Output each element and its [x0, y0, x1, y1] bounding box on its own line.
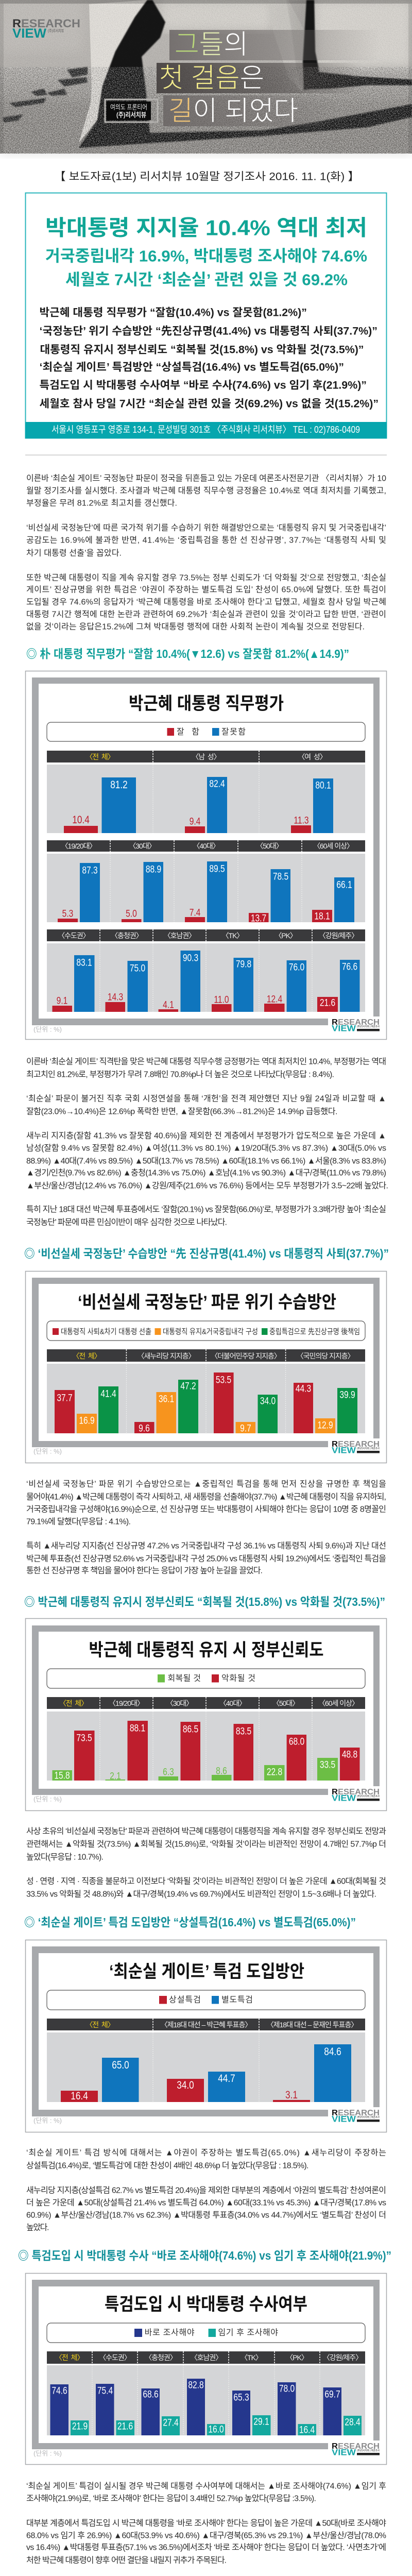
- section heading 1: ◎ 朴 대통령 직무평가 “잘함 10.4%(▼12.6) vs 잘못함 81.2%(▲14.9)”: [26, 647, 349, 660]
- intro text block: 공감도는 16.9%에 불과한 반면, 41.4%는 ‘중립특검을 통한 선 진상규명’, 37.7%는 ‘대통령직 사퇴 및: [26, 536, 386, 545]
- bar chart investigation: 21.9: [72, 2420, 88, 2432]
- age header: 〈40대〉: [219, 1699, 246, 1707]
- bar chart investigation: 28.4: [345, 2416, 360, 2428]
- bar chart total gender: 81.2: [110, 779, 128, 791]
- chart logo: [332, 1439, 380, 1455]
- bar chart age: 66.1: [336, 879, 352, 890]
- bar chart party: 39.9: [339, 1389, 355, 1400]
- unit note: (단위 : %): [33, 2116, 62, 2125]
- legend: 대통령직 사퇴&차기 대통령 선출: [61, 1327, 151, 1336]
- summary list: ‘최순실 게이트’ 특검방안 “상설특검(16.4%) vs 별도특검(65.0%)”: [39, 362, 344, 373]
- chart logo: (주)리서치뷰 | 여론조사: [357, 1794, 380, 1798]
- panel: chart 4 special prosecutor: [26, 1940, 386, 2132]
- legend: [47, 1321, 365, 1341]
- bar chart investigation: 27.4: [163, 2417, 179, 2428]
- chart logo: (주)리서치뷰 | 여론조사: [357, 1447, 380, 1450]
- unit note: (단위 : %): [33, 1795, 62, 1803]
- total gender header: 〈전 체〉: [85, 753, 114, 761]
- text block after chart 2: ‘비선실세 국정농단’ 파문 위기 수습방안으로는 ▲중립적인 특검을 통해 먼저 진상을 규명한 후 책임을: [26, 1480, 386, 1489]
- bar chart region: 9.1: [57, 995, 67, 1006]
- age header: 〈전 체〉: [59, 1699, 88, 1707]
- chart logo: (주)리서치뷰 | 여론조사: [357, 1025, 380, 1028]
- bar chart investigation: 75.4: [97, 2385, 113, 2396]
- text block after chart 3: 33.5% vs 악화될 것 48.8%)와 ▲대구/경북(19.4% vs 69.7%)에서도 비관적인 전망이 1.5~3.6배나 더 높았다.: [26, 1890, 376, 1899]
- hero logo: (주)리서치뷰: [48, 29, 64, 33]
- bar chart region: 75.0: [130, 962, 145, 974]
- bar chart trust: 83.5: [236, 1725, 251, 1737]
- text block after chart 1: ▲부산/울산/경남(12.4% vs 76.0%) ▲강원/제주(21.6% vs 76.6%) 등에서는 모두 부정평가가 3.5~22배 높았다.: [26, 1181, 388, 1190]
- legend: 상설특검: [169, 1995, 201, 2004]
- bar chart party: [47, 1364, 365, 1434]
- legend: [47, 2323, 365, 2343]
- chart logo: RESEARCH: [332, 2442, 380, 2450]
- bar chart party: 37.7: [57, 1392, 73, 1403]
- intro text block: ‘비선실세 국정농단’에 따른 국가적 위기를 수습하기 위한 해결방안으로는 ‘대통령직 유지 및 거국중립내각’: [26, 523, 386, 533]
- bar chart age: 18.1: [314, 910, 330, 922]
- text block after chart 5: [26, 2481, 386, 2565]
- bar chart trust: 8.6: [216, 1765, 227, 1776]
- bar chart investigation: 69.7: [324, 2388, 340, 2400]
- hero image: footprint in sand: [0, 0, 412, 154]
- region header: 〈강원/제주〉: [323, 2353, 362, 2362]
- bar chart age: 89.5: [209, 863, 225, 874]
- age header: 〈30대〉: [166, 1699, 193, 1707]
- text block after chart 5: 68.0% vs 임기 후 26.9%) ▲60대(53.9% vs 40.6%) ▲대구/경북(65.3% vs 29.1%) ▲부산/울산/경남(78.0%: [26, 2531, 386, 2540]
- text block after chart 2: 물어야(41.4%) ▲박근혜 대통령이 즉각 사퇴하고, 새 새통령을 선출해야(37.7%) ▲박근혜 대통령이 직을 유지하되,: [26, 1492, 386, 1501]
- bar chart region: 83.1: [76, 957, 92, 968]
- address bar: [25, 422, 387, 438]
- legend: 회복될 것: [168, 1673, 201, 1683]
- legend: 악화될 것: [221, 1673, 255, 1683]
- region header: [47, 2351, 365, 2364]
- text block after chart 1: ‘최순실’ 파문이 불거진 직후 국회 시정연설을 통해 ‘개헌’을 전격 제안했던 지난 9월 24일과 비교할 때 ▲: [26, 1094, 386, 1104]
- text block after chart 2: 박근혜 투표층(선 진상규명 52.6% vs 거국중립내각 구성 25.0% vs 대통령직 사퇴 19.2%)에서도 ‘중립적인 특검을: [26, 1554, 386, 1563]
- text block after chart 1: 최고치인 81.2%로, 부정평가가 무려 7.8배인 70.8%p나 더 높은 것으로 나타났다(무응답 : 8.4%).: [26, 1070, 334, 1079]
- bar chart trust: 73.5: [76, 1732, 92, 1743]
- chart logo: (주)리서치뷰 | 여론조사: [357, 2115, 380, 2119]
- party header: 〈국민의당 지지층〉: [297, 1352, 354, 1360]
- chart logo: RESEARCH: [332, 1788, 380, 1796]
- intro text block: 부정율은 무려 81.2%로 최고치를 갱신했다.: [26, 499, 177, 508]
- text block after chart 3: 사상 초유의 ‘비선실세 국정농단’ 파문과 관련하여 박근혜 대통령이 대통령직을 계속 유지할 경우 정부신뢰도 전망과: [26, 1827, 386, 1836]
- chart logo: [332, 1018, 380, 1033]
- bar chart age: 87.3: [82, 865, 98, 876]
- text block after chart 1: ▲경기/인천(9.7% vs 82.6%) ▲충청(14.3% vs 75.0%) ▲호남(4.1% vs 90.3%) ▲대구/경북(11.0% vs 79.8%): [26, 1168, 386, 1178]
- region header: 〈호남권〉: [164, 931, 195, 940]
- panel: chart 2 crisis solution: [26, 1272, 386, 1463]
- text block after chart 2: 특히 ▲새누리당 지지층(선 진상규명 47.2% vs 거국중립내각 구성 36.1% vs 대통령직 사퇴 9.6%)과 지난 대선: [26, 1541, 386, 1551]
- chart title: 특검도입 시 박대통령 수사여부: [105, 2295, 307, 2314]
- voter header: 〈제18대 대선 – 문재인 투표층〉: [267, 2021, 357, 2029]
- chart title: ‘최순실 게이트’ 특검 도입방안: [109, 1962, 304, 1981]
- bar chart party: 34.0: [260, 1395, 276, 1406]
- bar chart age: 5.0: [126, 908, 137, 919]
- age header: 〈60세 이상〉: [318, 1699, 358, 1707]
- bar chart region: 79.8: [236, 958, 251, 970]
- panel: chart 5 investigation: [26, 2273, 386, 2465]
- region header: 〈TK〉: [241, 2353, 262, 2362]
- text block after chart 1: 국정농단’ 파문에 따른 민심이반이 매우 심각한 것으로 나타났다.: [26, 1218, 227, 1227]
- bar chart trust: [47, 1711, 365, 1782]
- legend: 잘 함: [177, 727, 199, 737]
- text block after chart 1: 남성(잘함 9.4% vs 잘못함 82.4%) ▲여성(11.3% vs 80.1%) ▲19/20대(5.3% vs 87.3%) ▲30대(5.0% vs: [26, 1144, 386, 1153]
- bar chart total gender: 82.4: [209, 778, 225, 789]
- unit note: (단위 : %): [33, 1025, 62, 1033]
- text block after chart 1: 잘함(23.0%→10.4%)은 12.6%p 폭락한 반면, ▲잘못함(66.3%→81.2%)은 14.9%p 급등했다.: [26, 1107, 338, 1116]
- bar chart region: 12.4: [267, 993, 282, 1005]
- bar chart trust: 33.5: [320, 1759, 335, 1770]
- total gender header: 〈남 성〉: [192, 753, 220, 761]
- hero logo: VIEW: [12, 26, 46, 41]
- bar chart party: 12.9: [317, 1419, 333, 1431]
- bar chart region: 11.0: [214, 994, 229, 1005]
- age header: 〈60세 이상〉: [313, 842, 353, 850]
- age header: 〈50대〉: [256, 842, 283, 850]
- legend: 대통령직 유지&거국중립내각 구성: [163, 1327, 258, 1336]
- chart logo: RESEARCH: [332, 2108, 380, 2117]
- bar chart party: 44.3: [296, 1383, 311, 1394]
- region header: 〈수도권〉: [58, 931, 90, 940]
- bar chart prosecutor: 34.0: [177, 2080, 194, 2091]
- sub headline 2: 세월호 7시간 ‘최순실’ 관련 있을 것 69.2%: [65, 271, 348, 289]
- bar chart total gender: 9.4: [190, 816, 201, 827]
- main headline: 박대통령 지지율 10.4% 역대 최저: [45, 215, 367, 240]
- text block after chart 1: [26, 1057, 388, 1227]
- hero title band 1: 그들의: [175, 30, 248, 60]
- region header: 〈전 체〉: [55, 2353, 83, 2362]
- bar chart total gender: 11.3: [294, 815, 309, 826]
- intro text block: [26, 474, 386, 632]
- chart logo: VIEW: [332, 1446, 356, 1455]
- panel: headline summary box: [25, 193, 387, 438]
- summary list: 박근혜 대통령 직무평가 “잘함(10.4%) vs 잘못함(81.2%)”: [39, 307, 307, 318]
- bar chart prosecutor: 16.4: [71, 2091, 88, 2102]
- bar chart party: 9.6: [139, 1422, 150, 1434]
- chart logo: [332, 1788, 380, 1803]
- text block after chart 5: 대부분 계층에서 특검도입 시 박근혜 대통령을 ‘바로 조사해야’ 한다는 응답이 높은 가운데 ▲50대(바로 조사해야: [26, 2518, 386, 2528]
- text block after chart 4: 60.9%) ▲부산/울산/경남(18.7% vs 62.3%) ▲박대통령 투표층(34.0% vs 44.7%)에서도 ‘별도특검’ 찬성이 더: [26, 2210, 386, 2219]
- age header: 〈40대〉: [193, 842, 219, 850]
- chart logo: VIEW: [332, 1023, 356, 1033]
- intro text block: 없을 것’이라는 응답은15.2%에 그쳐 박대통령 행적에 대한 사회적 논란이 계속될 것으로 전망된다.: [26, 622, 365, 632]
- age header: [47, 840, 365, 852]
- bar chart region: 76.6: [342, 961, 357, 972]
- intro text block: 대통령 7시간 행적에 대한 논란과 관련하여 69.2%가 ‘최순실과 관련이 있을 것’이라고 답한 반면, ‘관련이: [26, 610, 386, 619]
- bar chart investigation: 82.8: [188, 2379, 204, 2391]
- bar chart trust: 48.8: [342, 1749, 357, 1760]
- bar chart party: 53.5: [216, 1374, 231, 1385]
- summary list: 대통령직 유지시 정부신뢰도 “회복될 것(15.8%) vs 악화될 것(73.5%)”: [40, 344, 364, 355]
- intro text block: 월말 정기조사를 실시했다. 조사결과 박근혜 대통령 직무수행 긍정율은 10.4%로 역대 최저치를 기록했고,: [26, 486, 386, 496]
- voter header: 〈전 체〉: [85, 2021, 114, 2029]
- bar chart total gender: [47, 765, 365, 833]
- chart logo: VIEW: [332, 2447, 356, 2458]
- region header: 〈TK〉: [222, 931, 243, 940]
- sub headline 1: 거국중립내각 16.9%, 박대통령 조사해야 74.6%: [45, 247, 367, 265]
- voter header: [47, 2019, 365, 2030]
- chart title: ‘비선실세 국정농단’ 파문 위기 수습방안: [78, 1293, 336, 1312]
- press release date line: 【 보도자료(1보) 리서치뷰 10월말 정기조사 2016. 11. 1(화) 】: [54, 171, 359, 182]
- bar chart party: 9.7: [240, 1422, 251, 1434]
- region header: 〈PK〉: [274, 931, 297, 940]
- bar chart age: 13.7: [251, 912, 266, 924]
- legend: 별도특검: [221, 1995, 253, 2004]
- chart logo: VIEW: [332, 1793, 356, 1803]
- legend: [47, 722, 365, 741]
- summary list: 세월호 참사 당일 7시간 “최순실 관련 있을 것(69.2%) vs 없을 것(15.2%)”: [39, 398, 379, 410]
- chart logo: [332, 2108, 380, 2124]
- bar chart region: 90.3: [183, 952, 198, 963]
- chart logo: RESEARCH: [332, 1439, 380, 1449]
- bar chart total gender: 80.1: [315, 779, 331, 791]
- bar chart region: 4.1: [163, 999, 174, 1010]
- region header: 〈PK〉: [286, 2353, 308, 2362]
- bar chart prosecutor: 3.1: [285, 2090, 298, 2101]
- hero title band 1: [169, 30, 380, 60]
- party header: 〈새누리당 지지층〉: [137, 1352, 195, 1360]
- intro text block: 도입될 경우 74.6%의 응답자가 ‘박근혜 대통령을 바로 조사해야 한다’고 답했고, 세월호 참사 당일 박근혜: [26, 598, 386, 607]
- bar chart trust: 15.8: [54, 1770, 70, 1781]
- text block after chart 1: 새누리 지지층(잘함 41.3% vs 잘못함 40.6%)을 제외한 전 계층에서 부정평가가 압도적으로 높은 가운데 ▲: [26, 1131, 386, 1141]
- unit note: (단위 : %): [33, 1448, 62, 1455]
- text block after chart 1: 이른바 ‘최순실 게이트’ 직격탄을 맞은 박근혜 대통령 직무수행 긍정평가는 역대 최저치인 10.4%, 부정평가는 역대: [26, 1057, 386, 1066]
- hero title band 3: 길이 되었다: [168, 96, 298, 126]
- bar chart investigation: 74.6: [52, 2385, 67, 2396]
- bar chart total gender: 10.4: [72, 815, 90, 826]
- bar chart investigation: 16.4: [299, 2424, 315, 2435]
- bar chart prosecutor: 65.0: [112, 2060, 129, 2071]
- total gender header: [47, 751, 365, 762]
- text block after chart 4: 높았다.: [26, 2223, 49, 2232]
- text block after chart 5: 처한 박근혜 대통령이 향후 어떤 결단을 내릴지 귀추가 주목된다.: [26, 2555, 227, 2565]
- bar chart party: 47.2: [180, 1380, 196, 1392]
- region header: 〈강원/제주〉: [319, 931, 358, 940]
- text block after chart 2: 79.1%에 달했다(무응답 : 4.1%).: [26, 1517, 131, 1526]
- hero logo: RESEARCH: [12, 16, 80, 30]
- chart logo: VIEW: [332, 2114, 356, 2124]
- bar chart prosecutor: 84.6: [324, 2046, 341, 2058]
- text block after chart 4: 상설특검(16.4%)로, ‘별도특검’에 대한 찬성이 4배인 48.6%p 더 높았다(무응답 : 18.5%).: [26, 2161, 309, 2170]
- text block after chart 5: vs 16.4%) ▲박대통령 투표층(57.1% vs 36.5%)에서조차 ‘바로 조사해야’ 한다는 응답이 더 높았다. ‘사면초가’에: [26, 2543, 386, 2552]
- party header: 〈전 체〉: [72, 1352, 101, 1360]
- section heading 4: ◎ ‘최순실 게이트’ 특검 도입방안 “상설특검(16.4%) vs 별도특검(65.0%)”: [24, 1916, 356, 1929]
- bar chart party: 16.9: [79, 1415, 95, 1426]
- intro text block: 게이트’ 진상규명을 위한 특검은 ‘야권이 주장하는 별도특검 도입’ 찬성이 65.0%에 달했다. 또한 특검이: [26, 585, 386, 595]
- party header: [47, 1349, 365, 1362]
- hero title band 2: 첫 걸음은: [159, 63, 264, 93]
- legend: [47, 1990, 365, 2010]
- text block after chart 3: 관련해서는 ▲악화될 것(73.5%) ▲회복될 것(15.8%)로, ‘악화될 것’이라는 비관적인 전망이 4.7배인 57.7%p 더: [26, 1839, 386, 1849]
- hero logo: [12, 16, 80, 41]
- summary list: [39, 307, 379, 410]
- bar chart trust: 68.0: [289, 1736, 304, 1747]
- region header: 〈호남권〉: [191, 2353, 222, 2362]
- bar chart region: 14.3: [108, 991, 123, 1003]
- bar chart investigation: [47, 2365, 365, 2435]
- age header: 〈19/20대〉: [61, 842, 96, 850]
- bar chart investigation: 21.6: [117, 2420, 133, 2432]
- text block after chart 5: ‘최순실 게이트’ 특검이 실시될 경우 박근혜 대통령 수사여부에 대해서는 ▲바로 조사해야(74.6%) ▲임기 후: [26, 2481, 386, 2490]
- region header: [47, 929, 365, 941]
- panel: chart 1 approval: [26, 671, 386, 1040]
- region header: 〈충청권〉: [145, 2353, 177, 2362]
- total gender header: 〈여 성〉: [298, 753, 327, 761]
- text block after chart 2: 거국중립내각을 구성해야(16.9%)순으로, 선 진상규명 또는 박대통령이 사퇴해야 한다는 응답이 10명 중 8명꼴인: [26, 1504, 386, 1514]
- bar chart party: 36.1: [159, 1393, 174, 1404]
- region header: 〈수도권〉: [99, 2353, 131, 2362]
- chart logo: RESEARCH: [332, 1018, 380, 1026]
- text block after chart 2: [26, 1480, 386, 1575]
- hero badge: [105, 99, 158, 122]
- intro text block: 차기 대통령 선출’을 꼽았다.: [26, 548, 122, 557]
- legend: [47, 1669, 365, 1688]
- hero title band 2: [157, 63, 363, 93]
- text block after chart 1: 88.9%) ▲40대(7.4% vs 89.5%) ▲50대(13.7% vs 78.5%) ▲60대(18.1% vs 66.1%) ▲서울(8.3% vs 83.8%): [26, 1156, 386, 1165]
- bar chart investigation: 65.3: [233, 2392, 249, 2403]
- bar chart region: [47, 943, 365, 1012]
- bar chart prosecutor: 44.7: [218, 2073, 235, 2084]
- bar chart investigation: 78.0: [279, 2383, 295, 2394]
- text block after chart 3: 성 · 연령 · 지역 · 직종을 불문하고 이전보다 ‘악화될 것’이라는 비관적인 전망이 더 높은 가운데 ▲60대(회복될 것: [26, 1876, 386, 1886]
- bar chart trust: 86.5: [183, 1723, 198, 1735]
- unit note: (단위 : %): [33, 2449, 62, 2458]
- bar chart investigation: 68.6: [143, 2388, 159, 2400]
- text block after chart 3: 높았다(무응답 : 10.7%).: [26, 1853, 104, 1862]
- bar chart investigation: 29.1: [253, 2416, 269, 2427]
- bar chart region: 21.6: [320, 997, 335, 1008]
- text block after chart 4: 새누리당 지지층(상설특검 62.7% vs 별도특검 20.4%)을 제외한 대부분의 계층에서 ‘야권의 별도특검’ 찬성여론이: [26, 2185, 386, 2195]
- legend: 바로 조사해야: [145, 2328, 195, 2337]
- hero badge: (주)리서치뷰: [116, 111, 146, 118]
- text block after chart 2: 통한 선 진상규명 후 책임을 물어야 한다’는 응답이 가장 높아 눈길을 끌었다.: [26, 1566, 263, 1575]
- intro text block: 이른바 ‘최순실 게이트’ 국정농단 파문이 정국을 뒤흔들고 있는 가운데 여론조사전문기관 〈리서치뷰〉가 10: [26, 474, 386, 483]
- bar chart trust: 88.1: [130, 1722, 145, 1734]
- address bar: 서울시 영등포구 영중로 134-1, 문성빌딩 301호 〈주식회사 리서치뷰〉 TEL : 02)786-0409: [52, 425, 360, 435]
- age header: 〈50대〉: [272, 1699, 299, 1707]
- bar chart prosecutor: [47, 2032, 365, 2102]
- text block after chart 4: ‘최순실 게이트’ 특검 방식에 대해서는 ▲야권이 주장하는 별도특검(65.0%) ▲새누리당이 주장하는: [26, 2148, 386, 2158]
- intro text block: 또한 박근혜 대통령이 직을 계속 유지할 경우 73.5%는 정부 신뢰도가 ‘더 악화될 것’으로 전망했고, ‘최순실: [26, 573, 386, 582]
- region header: 〈충청권〉: [111, 931, 143, 940]
- panel: chart 3 trust: [26, 1619, 386, 1810]
- bar chart trust: 22.8: [267, 1766, 282, 1777]
- age header: 〈19/20대〉: [109, 1699, 144, 1707]
- chart logo: [332, 2442, 380, 2458]
- party header: 〈더불어민주당 지지층〉: [211, 1352, 281, 1360]
- bar chart region: 76.0: [289, 961, 304, 973]
- chart title: 박근혜 대통령 직무평가: [129, 694, 284, 714]
- bar chart age: 78.5: [273, 871, 288, 882]
- bar chart trust: 6.3: [163, 1766, 174, 1777]
- bar chart party: 41.4: [100, 1388, 116, 1399]
- age header: 〈30대〉: [129, 842, 156, 850]
- bar chart trust: 2.1: [110, 1770, 121, 1782]
- bar chart investigation: 16.0: [208, 2424, 224, 2435]
- chart title: 박근혜 대통령직 유지 시 정부신뢰도: [89, 1640, 323, 1660]
- text block after chart 1: 특히 지난 18대 대선 박근혜 투표층에서도 ‘잘함(20.1%) vs 잘못함(66.0%)’로, 부정평가가 3.3배가량 높아 ‘최순실: [26, 1205, 386, 1214]
- chart logo: (주)리서치뷰 | 여론조사: [357, 2449, 380, 2452]
- text block after chart 5: 조사해야(21.9%)로, ‘바로 조사해야’ 한다는 응답이 3.4배인 52.7%p 높았다(무응답 :3.5%).: [26, 2494, 316, 2503]
- voter header: 〈제18대 대선 – 박근혜 투표층〉: [161, 2021, 251, 2029]
- summary list: ‘국정농단’ 위기 수습방안 “先진상규명(41.4%) vs 대통령직 사퇴(37.7%)”: [39, 326, 377, 337]
- bar chart age: 7.4: [190, 907, 201, 918]
- legend: 중립특검으로 先진상규명 後책임: [269, 1327, 360, 1336]
- summary list: 특검도입 시 박대통령 수사여부 “바로 수사(74.6%) vs 임기 후(21.9%)”: [39, 379, 367, 392]
- text block after chart 3: [26, 1827, 386, 1899]
- bar chart age: [47, 854, 365, 924]
- hero badge: 여의도 프론티어: [110, 103, 147, 111]
- bar chart age: 5.3: [62, 908, 73, 919]
- text block after chart 4: 더 높은 가운데 ▲50대(상설특검 21.4% vs 별도특검 64.0%) ▲60대(33.1% vs 45.3%) ▲대구/경북(17.8% vs: [26, 2198, 386, 2207]
- legend: 임기 후 조사해야: [218, 2328, 278, 2337]
- legend: 잘못함: [221, 727, 246, 737]
- text block after chart 4: [26, 2148, 386, 2232]
- bar chart age: 88.9: [146, 863, 161, 875]
- age header: [47, 1697, 365, 1709]
